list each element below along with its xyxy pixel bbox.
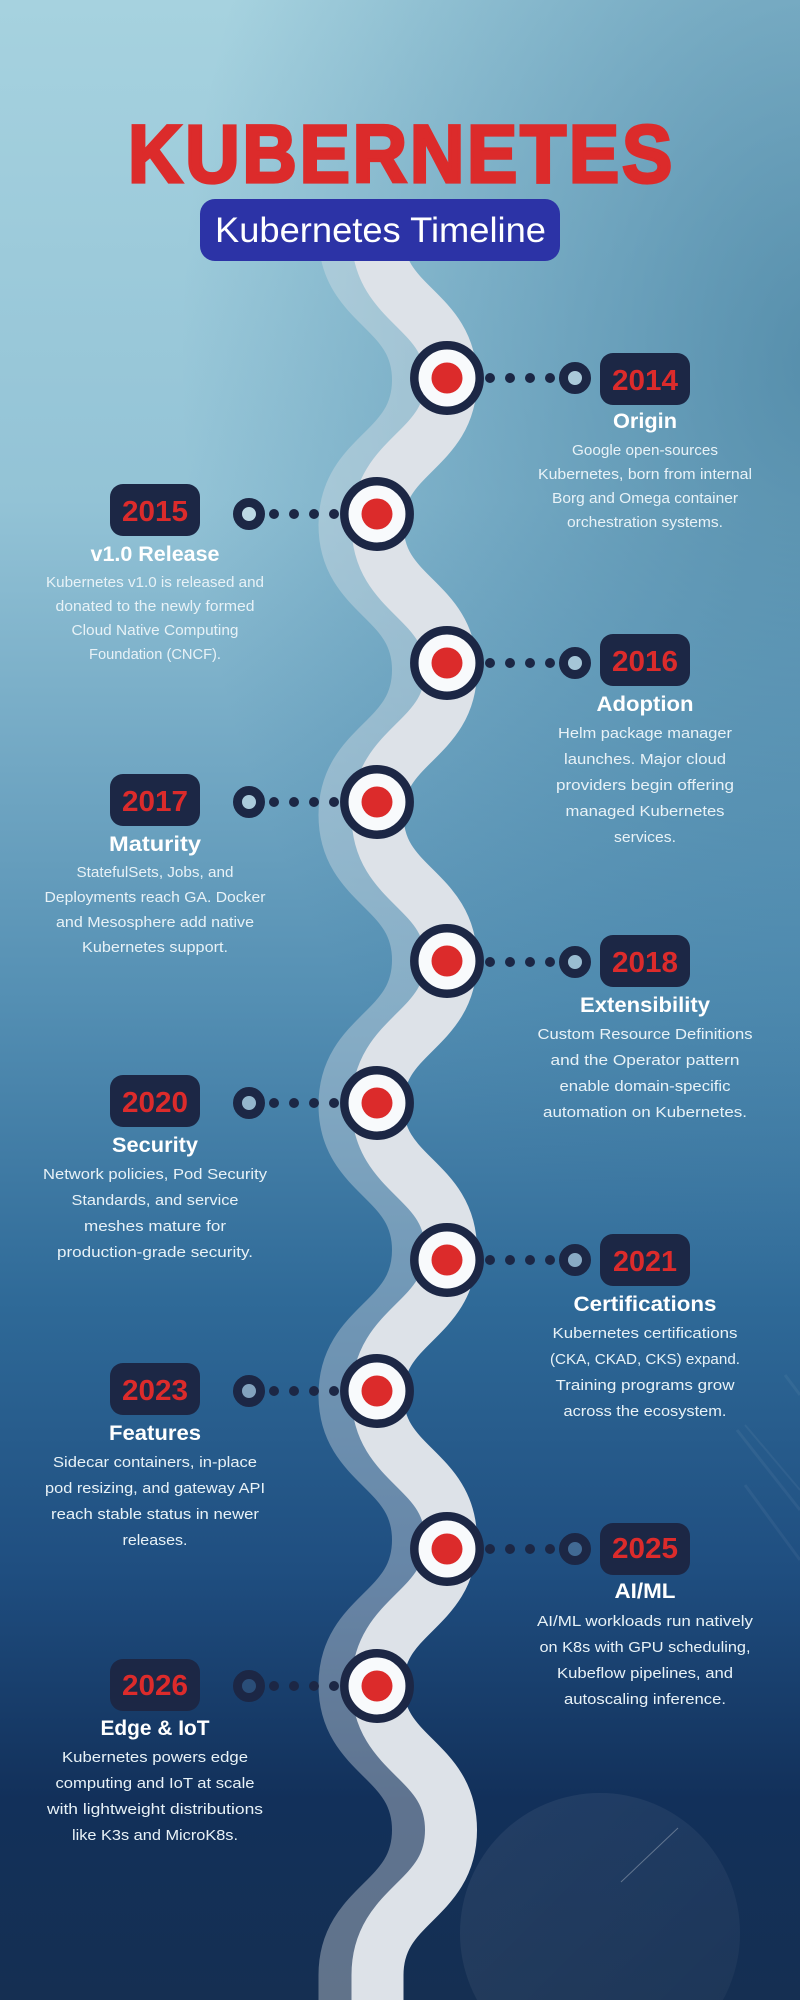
milestone: 2014 Origin: 2014: [612, 365, 678, 397]
milestone: 2025 AI/ML: AI/ML: [614, 1580, 676, 1603]
milestone: 2026 Edge & IoT: with lightweight distributions: [46, 1801, 263, 1818]
milestone: 2021 Certifications: Training programs grow: [556, 1377, 735, 1394]
milestone: 2017 Maturity: 2017: [122, 786, 188, 818]
milestone: 2023 Features: Features: [109, 1422, 201, 1445]
milestone: 2016 Adoption: [414, 630, 734, 846]
subtitle pill: Kubernetes Timeline: [215, 211, 546, 250]
milestone: 2025 AI/ML: 2025: [612, 1533, 678, 1565]
milestone: 2026 Edge & IoT: computing and IoT at scale: [56, 1775, 255, 1792]
milestone: 2021 Certifications: Certifications: [574, 1293, 716, 1316]
milestone: 2016 Adoption: managed Kubernetes: [566, 803, 724, 820]
milestone: 2015 v1.0 Release: [46, 481, 410, 663]
milestone: 2018 Extensibility: [414, 928, 752, 1121]
milestone: 2018 Extensibility: Extensibility: [580, 994, 710, 1017]
milestone: 2016 Adoption: services.: [614, 829, 676, 846]
milestone: 2020 Security: [43, 1070, 410, 1261]
milestone: 2014 Origin: [414, 345, 752, 531]
milestone: 2023 Features: Sidecar containers, in-place: [53, 1454, 257, 1471]
milestone: 2026 Edge & IoT: 2026: [122, 1670, 188, 1702]
milestone: 2016 Adoption: providers begin offering: [556, 777, 734, 794]
milestone: 2020 Security: production-grade security.: [57, 1244, 253, 1261]
wave shadow: [344, 210, 418, 2000]
milestone: 2018 Extensibility: and the Operator pattern: [550, 1052, 740, 1069]
milestone: 2016 Adoption: 2016: [612, 646, 678, 678]
milestone: 2021 Certifications: 2021: [613, 1246, 677, 1278]
milestone: 2026 Edge & IoT: Edge & IoT: [100, 1717, 210, 1740]
milestone: 2016 Adoption: Helm package manager: [558, 725, 732, 742]
milestone: 2021 Certifications: Kubernetes certifications: [552, 1325, 738, 1342]
milestone: 2015 v1.0 Release: Cloud Native Computing: [72, 622, 238, 639]
decorative circle: bottom right: [460, 1793, 740, 2000]
milestone: 2023 Features: releases.: [122, 1532, 188, 1549]
milestone: 2014 Origin: Kubernetes, born from internal: [538, 466, 752, 483]
milestone: 2023 Features: pod resizing, and gateway API: [45, 1480, 265, 1497]
milestone: 2026 Edge & IoT: Kubernetes powers edge: [62, 1749, 248, 1766]
milestone: 2025 AI/ML: Kubeflow pipelines, and: [557, 1665, 733, 1682]
milestone: 2020 Security: 2020: [122, 1087, 188, 1119]
wave timeline band: [378, 210, 451, 2000]
milestone: 2026 Edge & IoT: [46, 1653, 410, 1844]
milestone: 2021 Certifications: [414, 1227, 740, 1420]
milestone: 2017 Maturity: Deployments reach GA. Docker: [44, 889, 266, 906]
milestone: 2017 Maturity: Maturity: [109, 833, 201, 856]
milestone: 2026 Edge & IoT: like K3s and MicroK8s.: [72, 1827, 238, 1844]
milestone: 2025 AI/ML: AI/ML workloads run natively: [537, 1613, 754, 1630]
milestone: 2023 Features: [45, 1358, 410, 1549]
milestone: 2023 Features: reach stable status in newer: [51, 1506, 259, 1523]
milestone: 2021 Certifications: (CKA, CKAD, CKS) expand.: [550, 1351, 740, 1368]
subtitle pill: [200, 199, 560, 261]
milestone: 2017 Maturity: and Mesosphere add native: [56, 914, 254, 931]
milestone: 2017 Maturity: Kubernetes support.: [82, 939, 228, 956]
milestone: 2016 Adoption: launches. Major cloud: [564, 751, 726, 768]
milestone: 2018 Extensibility: enable domain-specific: [560, 1078, 731, 1095]
milestone: 2014 Origin: orchestration systems.: [567, 514, 723, 531]
milestone: 2016 Adoption: Adoption: [596, 693, 694, 716]
milestone: 2021 Certifications: across the ecosystem.: [564, 1403, 726, 1420]
milestone: 2025 AI/ML: [414, 1516, 754, 1708]
milestone: 2015 v1.0 Release: donated to the newly formed: [56, 598, 254, 615]
milestone: 2018 Extensibility: 2018: [612, 947, 678, 979]
milestone: 2025 AI/ML: autoscaling inference.: [564, 1691, 726, 1708]
milestone: 2014 Origin: Borg and Omega container: [552, 490, 738, 507]
decorative streaks: right edge: [737, 1375, 800, 1560]
milestone: 2015 v1.0 Release: Foundation (CNCF).: [89, 646, 221, 663]
milestone: 2015 v1.0 Release: Kubernetes v1.0 is released and: [46, 574, 264, 591]
milestone: 2020 Security: Standards, and service: [72, 1192, 238, 1209]
milestone: 2015 v1.0 Release: 2015: [122, 496, 188, 528]
milestone: 2020 Security: meshes mature for: [84, 1218, 226, 1235]
milestone: 2023 Features: 2023: [122, 1375, 188, 1407]
milestone: 2015 v1.0 Release: v1.0 Release: [90, 543, 220, 566]
milestone: 2017 Maturity: [44, 769, 410, 956]
milestone: 2025 AI/ML: on K8s with GPU scheduling,: [540, 1639, 750, 1656]
milestone: 2018 Extensibility: Custom Resource Definitions: [538, 1026, 752, 1043]
milestone: 2014 Origin: Origin: [613, 410, 677, 433]
milestone: 2017 Maturity: StatefulSets, Jobs, and: [76, 864, 234, 881]
title: KUBERNETES: [128, 109, 675, 200]
milestone: 2020 Security: Network policies, Pod Security: [43, 1166, 268, 1183]
milestone: 2020 Security: Security: [112, 1134, 198, 1157]
milestone: 2018 Extensibility: automation on Kubernetes.: [543, 1104, 747, 1121]
milestone: 2014 Origin: Google open-sources: [572, 442, 718, 459]
